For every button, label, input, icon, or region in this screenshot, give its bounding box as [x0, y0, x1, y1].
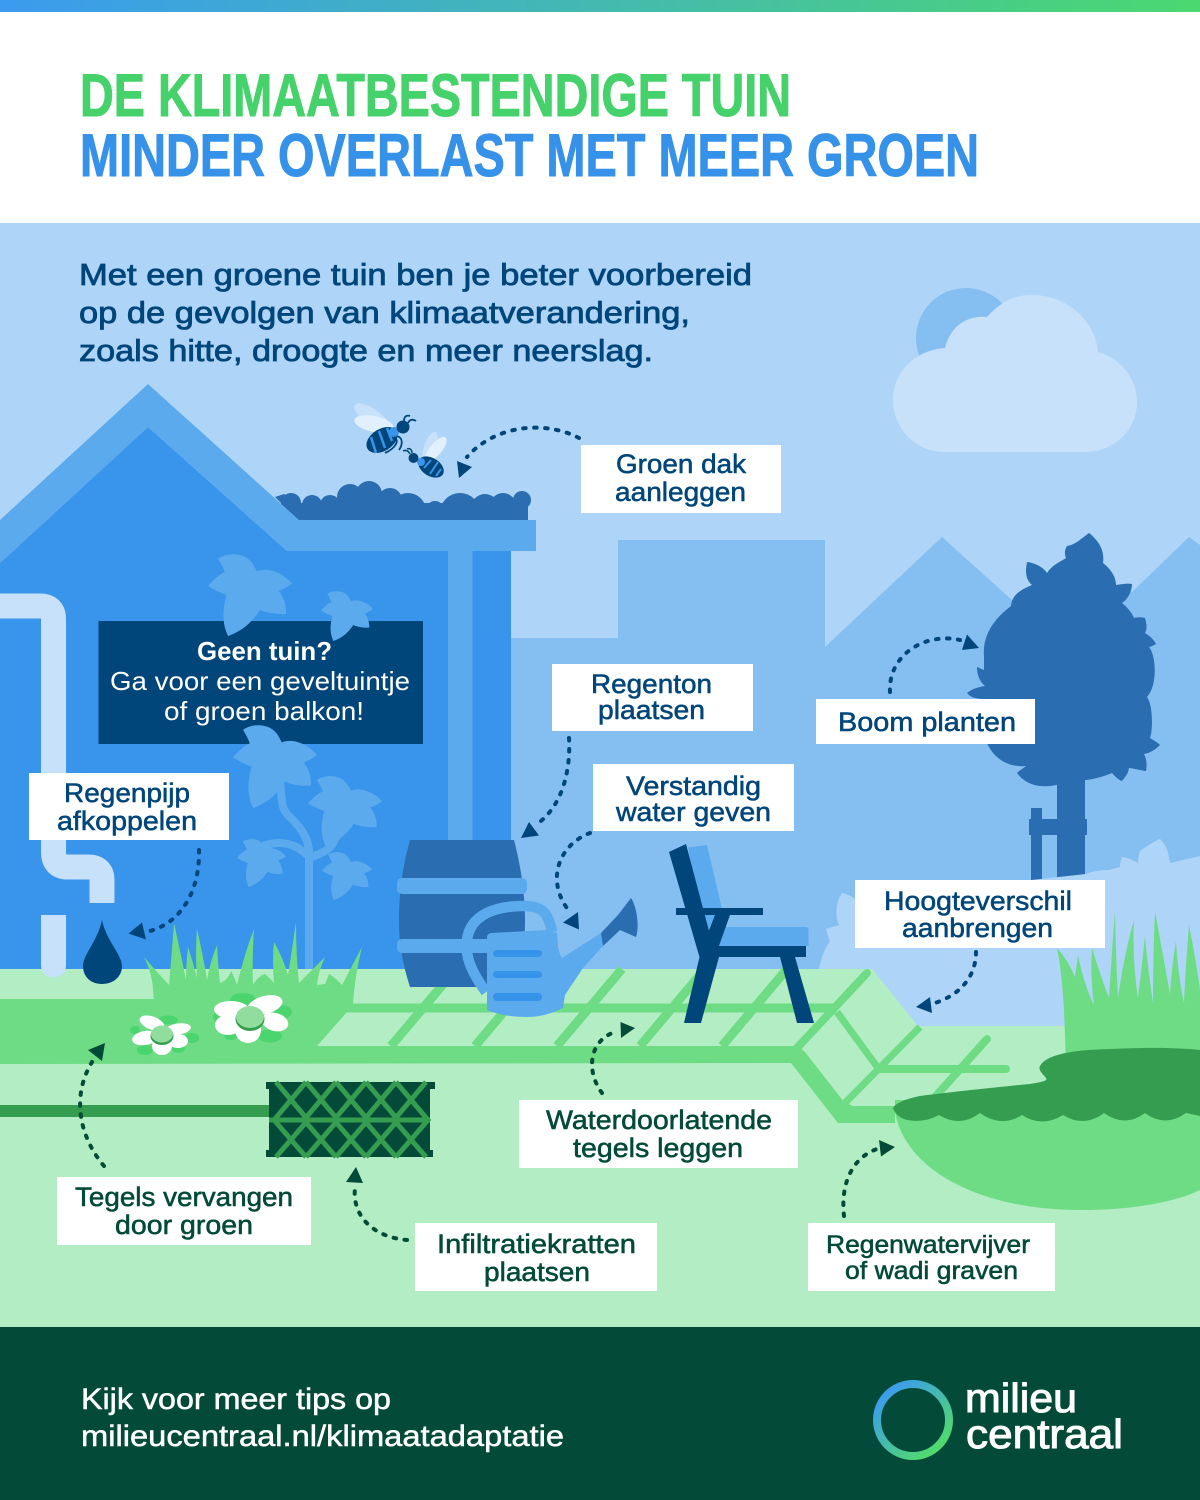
intro text: zoals hitte, droogte en meer neerslag. [79, 333, 653, 368]
label: infiltration crates: Infiltratiekratten [437, 1229, 636, 1259]
sky background [0, 223, 1200, 1327]
label: watering: water geven [615, 797, 771, 827]
can ribs [493, 950, 542, 1001]
grass bed left [144, 922, 362, 1012]
label: rain pipe: Regenpijp [64, 778, 190, 808]
label: replace tiles: Tegels vervangen [75, 1182, 293, 1212]
intro text: Met een groene tuin ben je beter voorbereid [79, 257, 752, 292]
grass clump right [1057, 911, 1200, 1100]
footer text: Kijk voor meer tips op [81, 1383, 391, 1416]
label: pond: of wadi graven [845, 1257, 1018, 1285]
rain pipe [0, 606, 102, 903]
can rose [601, 898, 638, 946]
header panel [0, 12, 1200, 223]
arrow: infiltration crate [346, 1167, 407, 1240]
label: height difference: aanbrengen [902, 913, 1053, 943]
barrel hoops [397, 878, 527, 953]
title line 1: DE KLIMAATBESTENDIGE TUIN [80, 62, 791, 129]
bee small [403, 430, 450, 482]
pond water [893, 1048, 1200, 1122]
info box text [110, 636, 410, 726]
label: watering [593, 764, 794, 831]
label: green roof [581, 445, 781, 513]
plant stem [263, 770, 340, 969]
label: pond [808, 1223, 1055, 1291]
tree trunk [1057, 770, 1085, 885]
tree stake [1029, 808, 1087, 885]
climbing plant and info box [98, 554, 423, 969]
label: permeable tiles: Waterdoorlatende [546, 1105, 772, 1135]
label: height difference [855, 880, 1105, 948]
info box text: of groen balkon! [164, 696, 364, 726]
arrow: pond [843, 1140, 895, 1216]
disconnected lower pipe [41, 915, 66, 977]
tree [967, 533, 1160, 885]
logo: milieu [965, 1375, 1077, 1421]
label: permeable tiles: tegels leggen [573, 1133, 743, 1163]
intro text: op de gevolgen van klimaatverandering, [79, 295, 690, 330]
label: green roof: Groen dak [616, 449, 747, 479]
info box text: Ga voor een geveltuintje [110, 666, 410, 696]
garden chair [669, 844, 814, 1023]
label: permeable tiles [519, 1100, 798, 1168]
label: rain pipe: afkoppelen [57, 806, 197, 836]
title line 2: MINDER OVERLAST MET MEER GROEN [80, 122, 979, 189]
green roof [275, 481, 531, 533]
label: replace tiles [57, 1177, 311, 1245]
label: pond: Regenwatervijver [826, 1231, 1030, 1259]
info box text: Geen tuin? [197, 636, 332, 666]
water drop [83, 920, 122, 984]
sun and cloud [893, 288, 1137, 452]
drain pipe underground [0, 1105, 270, 1117]
chair cushions [688, 845, 808, 946]
top gradient bar [0, 0, 1200, 12]
intro text [79, 257, 752, 368]
roof and gutter [0, 384, 536, 563]
arrow: tree [890, 634, 979, 692]
footer [0, 1327, 1200, 1500]
ground [0, 969, 1200, 1327]
chair frame [669, 844, 814, 1023]
bee large [350, 398, 416, 458]
arrow: height difference [916, 952, 976, 1013]
label: rain barrel: Regenton [591, 669, 712, 699]
label: rain barrel: plaatsen [598, 695, 705, 725]
can body and spout [487, 930, 603, 1017]
arrow: green roof [457, 428, 579, 478]
arrow: rain barrel [521, 738, 569, 838]
arrow: permeable tiles [592, 1022, 635, 1093]
logo [877, 1375, 1123, 1457]
watering can [467, 898, 638, 1017]
label: tree: Boom planten [838, 707, 1016, 737]
label: rain barrel [552, 664, 753, 731]
background buildings and mountains [511, 537, 1200, 1030]
rain barrel [397, 840, 527, 987]
arrow: rain pipe [128, 850, 199, 940]
arrow: watering [557, 833, 590, 930]
label: watering: Verstandig [626, 771, 761, 801]
light hedge behind the slope [818, 839, 1200, 1040]
house [0, 384, 536, 975]
footer text: milieucentraal.nl/klimaatadaptatie [81, 1420, 564, 1453]
logo: centraal [966, 1411, 1123, 1457]
label: infiltration crates [415, 1223, 657, 1291]
tree crown [967, 533, 1160, 786]
label: rain pipe [29, 773, 229, 840]
label: replace tiles: door groen [115, 1210, 253, 1240]
house wall [0, 427, 511, 975]
infiltration crate [266, 1082, 435, 1157]
ivy leaves [208, 554, 382, 900]
rainwater pond [893, 1048, 1200, 1210]
arrow: replace tiles [80, 1043, 105, 1166]
can handle [467, 906, 552, 992]
label: height difference: Hoogteverschil [884, 886, 1072, 916]
label: tree [816, 699, 1035, 744]
label: infiltration crates: plaatsen [484, 1257, 590, 1287]
flower large [213, 992, 292, 1043]
downspout to rain barrel [448, 551, 472, 846]
footer text [81, 1383, 564, 1453]
label: green roof: aanleggen [615, 477, 746, 507]
info box [98, 621, 423, 744]
flower small [130, 1012, 199, 1055]
permeable tiles [0, 969, 1006, 1123]
